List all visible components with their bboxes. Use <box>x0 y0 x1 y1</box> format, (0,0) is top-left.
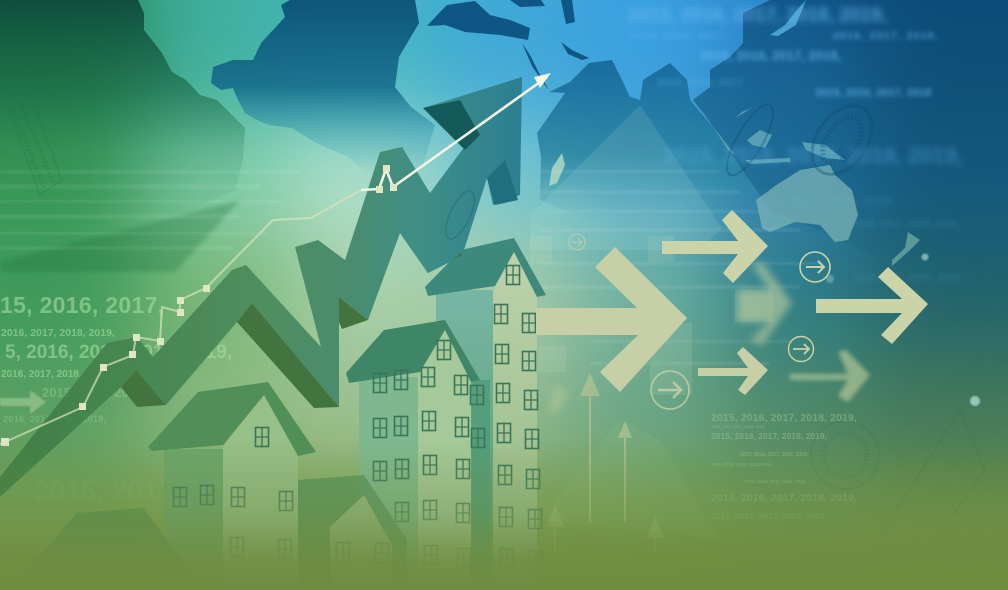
arrow head dark barb <box>423 100 480 150</box>
blurred arrows <box>548 262 870 415</box>
blurred dates: top right: 2015, 2016, 2017 <box>657 77 743 89</box>
line chart with arrow <box>0 73 551 446</box>
ocean: Indian <box>537 60 760 225</box>
house: bottom left <box>10 508 195 590</box>
blurred dates: top right: 2015, 2016, 2017, <box>630 31 728 42</box>
up arrow medium <box>618 421 632 522</box>
up arrow tall <box>580 373 600 522</box>
dates: left: 2015, 2016, 2017, <box>42 385 147 400</box>
blurred dates: top right: 2015, 2016, 2017, 2018, <box>700 48 841 63</box>
blurred dates: top right: 2015, 2016, 2017, 2018, 2019, <box>628 5 887 26</box>
circle arrow icons <box>569 234 830 409</box>
icon: circle arrow upper <box>800 252 830 282</box>
chart arrowhead <box>534 73 551 88</box>
upward arrows <box>546 373 665 552</box>
medium right shade <box>471 380 490 590</box>
dates: bottom right: 2015, 2016, 2017, 2018, 2019, <box>745 479 806 484</box>
tower roof <box>425 238 546 297</box>
blurred dates: top right: 2016, 2017, 2018, 2019, <box>852 219 960 230</box>
dates: bottom right <box>711 412 857 521</box>
dollar bill: centre right <box>530 105 722 250</box>
arrow shadow faces <box>121 193 462 408</box>
blurred arrow: lower right <box>790 350 870 402</box>
icon: circle arrow large <box>651 371 689 409</box>
blurred dates: top right: 2016, 2017, 2018, 2019, <box>854 273 962 284</box>
arrow: upper <box>662 210 768 283</box>
tower gable wall <box>493 250 537 590</box>
arrow main face <box>0 77 522 497</box>
sea: Mediterranean and Europe <box>427 0 589 90</box>
ocean: Atlantic <box>211 0 435 175</box>
chart line lower <box>0 190 361 444</box>
icon: circle arrow middle <box>788 336 814 362</box>
blurred dates: top right: 2016, 2017, 2018, <box>833 31 939 42</box>
land: New Zealand <box>892 232 920 266</box>
dates: bottom right: 2015, 2016, 2017, 2018, 2019, <box>740 452 809 458</box>
house: tall tower <box>425 238 546 590</box>
dates: bottom right: 2015, 2016, 2017, 2018, 2019, <box>711 492 857 504</box>
up arrow small right <box>646 516 665 552</box>
house windows <box>174 266 542 570</box>
dollar bill: top left <box>5 90 62 195</box>
small roof <box>148 382 316 456</box>
small gable wall <box>223 393 298 590</box>
medium left wall <box>359 377 418 590</box>
medium gable wall <box>418 327 471 590</box>
blurred arrow: left <box>0 390 46 414</box>
dates: bottom right: 2015, 2016, 2017, 2018, 2019 <box>711 511 825 521</box>
lower centre body <box>298 475 407 590</box>
dates: bottom right: 2015, 2016, 2017, 2018, 2019, <box>711 462 772 467</box>
ocean: Pacific east <box>693 0 1008 300</box>
3D growth arrow <box>0 77 522 497</box>
dates: left: 5, 2016, 2017, 2018, 2019, <box>5 342 232 363</box>
dates: left: 15, 2016, 2017, <box>0 292 164 318</box>
chart markers <box>1 165 397 446</box>
glowing dots <box>826 254 980 406</box>
dollar bill seals <box>719 95 884 185</box>
land: Australia <box>756 165 858 242</box>
arrow: lower <box>698 347 768 395</box>
dates: left <box>0 292 232 506</box>
house: lower centre <box>298 475 407 590</box>
medium roof <box>346 320 480 383</box>
blurred dates: top right <box>628 5 963 284</box>
dates: bottom right: 2015, 2016, 2017, 2018, 2019, <box>711 412 857 424</box>
icon: circle arrow small <box>569 234 585 250</box>
dates: bottom right: 2015, 2016, 2017, 2018, 2019, <box>711 431 827 441</box>
translucent squares <box>530 236 773 395</box>
house: small front <box>148 382 316 590</box>
streaks and overlays <box>0 90 985 540</box>
dates: bottom right: 2015, 2016, 2017, 2018, 2019, <box>711 424 766 429</box>
lower centre gable <box>330 495 392 590</box>
dollar bill: bottom centre <box>540 420 720 540</box>
dates: left: 2016, 2017, 2018, 2019, <box>1 327 115 339</box>
dollar bill: bottom right <box>811 410 985 540</box>
blurred dates: top right: 2015, 2016, 2017, 2018, 2019, <box>663 143 963 168</box>
house: medium tower <box>346 320 490 590</box>
dates: left: 2016, 2017, 2018, 2019, <box>3 414 106 425</box>
ocean: Pacific west <box>0 0 245 270</box>
blurred dates: top right: 2017, 2018, 2019, <box>790 193 895 208</box>
dark diagonal band <box>0 200 240 272</box>
land: Madagascar <box>549 153 565 186</box>
arrow head inner notch <box>487 160 518 205</box>
arrow: right <box>816 267 928 344</box>
land: Indonesia and New Guinea <box>712 108 845 164</box>
land: Japan <box>770 0 806 36</box>
up arrow small left <box>546 505 565 552</box>
blurred dates: top right: 2015, 2016, 2017, 2018 <box>815 87 931 99</box>
world map oceans <box>0 0 1008 300</box>
blurred arrow: centre <box>738 262 792 345</box>
bottom olive fade <box>0 440 1008 590</box>
blurred arrow: lower left <box>548 385 570 415</box>
dates: left: 2016, 2017 <box>34 475 174 506</box>
dollar detail on arrow <box>440 187 480 243</box>
tower left wall <box>436 290 493 590</box>
small left wall <box>164 449 223 590</box>
chart line upper <box>361 82 540 190</box>
big arrow <box>536 247 687 392</box>
dates: left: 2016, 2017, 2018, 2019, <box>1 369 110 380</box>
